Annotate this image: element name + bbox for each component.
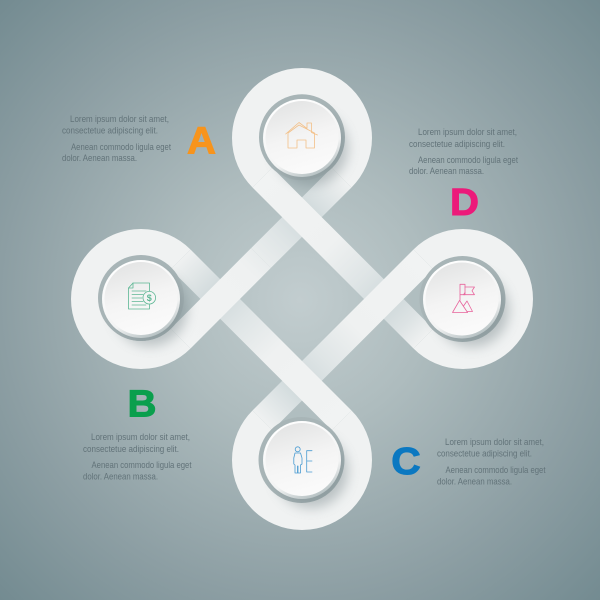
ribbon loop D xyxy=(423,243,519,355)
text block A: Lorem ipsum dolor sit amet, xyxy=(70,114,169,125)
strand A to D xyxy=(262,178,423,339)
button D xyxy=(420,256,509,347)
text block A: dolor. Aenean massa. xyxy=(62,153,137,164)
text block D: Lorem ipsum dolor sit amet, xyxy=(418,127,517,138)
text block B: dolor. Aenean massa. xyxy=(83,472,158,482)
strand B to A, lower half xyxy=(181,258,261,339)
text block D xyxy=(409,127,518,177)
ribbon loop A xyxy=(246,82,358,178)
strand C to B xyxy=(181,259,342,420)
letter B: B xyxy=(128,384,156,426)
text block C: dolor. Aenean massa. xyxy=(437,476,512,488)
icon: person with branches xyxy=(294,447,312,473)
ribbon loop C xyxy=(246,420,358,516)
icon: house xyxy=(286,122,318,148)
text block A: Aenean commodo ligula eget xyxy=(71,142,171,153)
text block C: Aenean commodo ligula eget xyxy=(446,465,546,476)
text block D: Aenean commodo ligula eget xyxy=(418,155,518,166)
button B xyxy=(98,255,187,346)
button A xyxy=(259,94,348,185)
icon: flag on mountain xyxy=(452,284,474,312)
icon: document with dollar: $ xyxy=(147,293,152,303)
text block B: Lorem ipsum dolor sit amet, xyxy=(91,432,190,443)
text block D: dolor. Aenean massa. xyxy=(409,166,484,177)
letter D: D xyxy=(450,182,479,224)
letter A: A xyxy=(187,120,216,162)
text block B: consectetue adipiscing elit. xyxy=(83,444,179,455)
text block B: Aenean commodo ligula eget xyxy=(92,460,192,471)
text block C: consectetue adipiscing elit. xyxy=(437,448,532,460)
text block A: consectetue adipiscing elit. xyxy=(62,126,158,136)
text block A xyxy=(62,114,171,164)
text block B xyxy=(83,432,192,482)
strand D to C xyxy=(262,259,423,420)
text block C: Lorem ipsum dolor sit amet, xyxy=(445,437,544,448)
text block D: consectetue adipiscing elit. xyxy=(409,139,505,150)
ribbon loop B xyxy=(85,243,181,355)
button C xyxy=(258,417,348,508)
letter C: C xyxy=(391,441,421,483)
strand B to A, upper half xyxy=(261,178,342,258)
text block C xyxy=(437,437,546,488)
looped ribbon xyxy=(85,82,519,516)
